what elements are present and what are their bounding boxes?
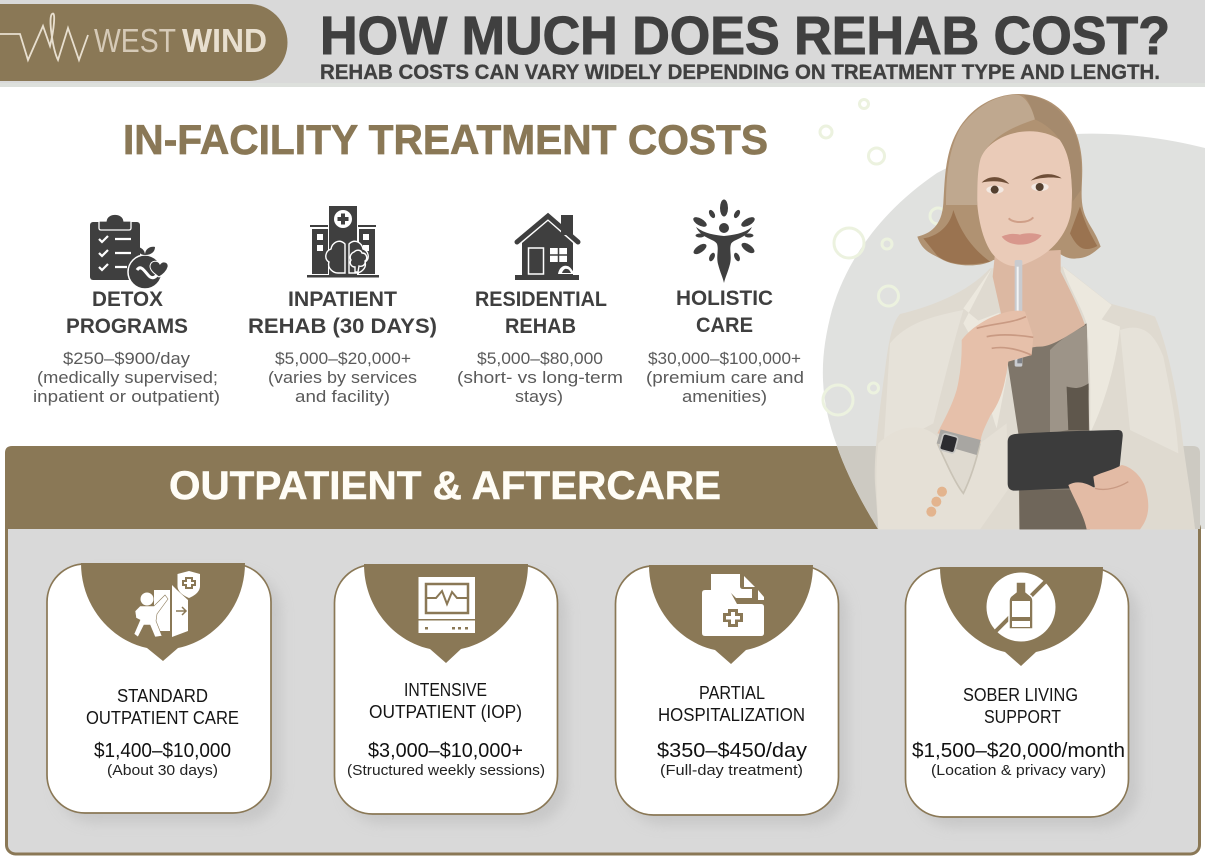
price text: inpatient or outpatient) [33, 387, 220, 406]
icon: heart monitor [418, 577, 475, 633]
heading: DETOX [92, 288, 163, 311]
lapels [963, 268, 1007, 428]
header tab [5, 446, 878, 529]
price text: (premium care and [646, 368, 804, 387]
icon tab [364, 564, 528, 663]
card title [369, 680, 522, 722]
heading: in-facility treatment costs: IN-FACILITY TREATMENT COSTS [123, 116, 768, 163]
heading: OUTPATIENT & AFTERCARE [169, 464, 721, 508]
card: sober living support [906, 567, 1139, 827]
heading: RESIDENTIAL [475, 288, 607, 311]
sleeve left [876, 423, 1008, 529]
right sleeve edge [1148, 487, 1195, 529]
card: standard outpatient care [47, 563, 281, 823]
hair [917, 94, 1101, 265]
heading [66, 288, 188, 338]
icon tab [649, 565, 813, 664]
header tab right part [837, 446, 1200, 529]
icon: hospital with brain [307, 206, 379, 278]
icon: no bottle [986, 572, 1056, 642]
card note: (Structured weekly sessions) [347, 762, 545, 779]
neck [993, 250, 1085, 360]
price text: $30,000–$100,000+ [648, 349, 801, 368]
pen [1015, 260, 1022, 367]
card price: $1,500–$20,000/month [912, 739, 1125, 762]
card note: (Full-day treatment) [660, 762, 803, 779]
card title: SUPPORT [984, 707, 1061, 727]
card title [86, 686, 239, 728]
card price: $350–$450/day [657, 739, 808, 762]
icon: clipboard with detox symbol [90, 214, 168, 289]
background circle behind portrait [823, 134, 1205, 529]
buttons [926, 487, 947, 517]
card note: (About 30 days) [107, 762, 218, 779]
icon tab [940, 567, 1103, 666]
heading [248, 288, 437, 338]
jacket [875, 267, 1195, 529]
price text: (varies by services [268, 368, 417, 387]
hand on tablet [1068, 465, 1148, 529]
item: inpatient rehab [248, 206, 437, 406]
icon tab [81, 563, 245, 661]
tablet [1008, 430, 1123, 491]
card title: STANDARD [117, 686, 208, 706]
logo wordmark: WEST [94, 22, 176, 59]
heading: REHAB (30 DAYS) [248, 315, 437, 338]
icon: figure with leaves [692, 200, 756, 283]
price text: (short- vs long-term [457, 368, 623, 387]
price text: (medically supervised; [37, 368, 218, 387]
price text [646, 349, 804, 406]
price text [268, 349, 417, 406]
card title: HOSPITALIZATION [658, 705, 805, 725]
price text: $5,000–$20,000+ [275, 349, 411, 368]
card title [658, 683, 805, 725]
price text [33, 349, 220, 406]
face [977, 131, 1072, 266]
card title: PARTIAL [699, 683, 765, 703]
facial features [982, 174, 1062, 245]
heading: HOLISTIC [676, 287, 773, 310]
hair sweep left [946, 95, 1035, 205]
price text: and facility) [295, 387, 390, 406]
subtitle: REHAB COSTS CAN VARY WIDELY DEPENDING ON TREATMENT TYPE AND LENGTH. [320, 61, 1160, 84]
decorative bubbles [820, 100, 946, 415]
card note: (Location & privacy vary) [931, 762, 1106, 779]
price text: stays) [515, 387, 563, 406]
hair sweep right [1023, 95, 1081, 202]
logo wordmark [94, 22, 267, 59]
item: residential rehab [457, 215, 623, 406]
icon: house [515, 215, 579, 280]
card price: $3,000–$10,000+ [368, 739, 523, 762]
portrait: woman with pen and tablet [875, 94, 1195, 529]
card title [963, 685, 1078, 727]
price text: $250–$900/day [63, 349, 191, 368]
heading: CARE [696, 314, 753, 337]
heading [475, 288, 607, 338]
heading: INPATIENT [288, 288, 397, 311]
card price: $1,400–$10,000 [94, 739, 231, 762]
title: HOW MUCH DOES REHAB COST? [320, 6, 1170, 66]
icon: person at door [134, 571, 200, 637]
card: intensive outpatient [334, 564, 567, 824]
price text: amenities) [682, 387, 767, 406]
logo wordmark: WIND [182, 22, 267, 59]
price text [457, 349, 623, 406]
card title: OUTPATIENT CARE [86, 708, 239, 728]
card title: INTENSIVE [404, 680, 487, 700]
panel: in-facility items [33, 200, 804, 406]
price text: $5,000–$80,000 [477, 349, 603, 368]
heading [676, 287, 773, 337]
header band [0, 0, 1205, 87]
heading: REHAB [505, 315, 576, 338]
card title: OUTPATIENT (IOP) [369, 702, 522, 722]
blouse [1007, 323, 1089, 529]
card title: SOBER LIVING [963, 685, 1078, 705]
watch [937, 429, 981, 455]
panel: outpatient and aftercare [5, 446, 1200, 854]
card: partial hospitalization [616, 565, 848, 825]
heading: PROGRAMS [66, 315, 188, 338]
item: detox programs [33, 214, 220, 406]
item: holistic care [646, 200, 804, 406]
logo pill [0, 4, 288, 81]
icon: medical folder [702, 574, 764, 636]
logo wave mark [0, 13, 88, 60]
hand with pen [937, 311, 1033, 443]
